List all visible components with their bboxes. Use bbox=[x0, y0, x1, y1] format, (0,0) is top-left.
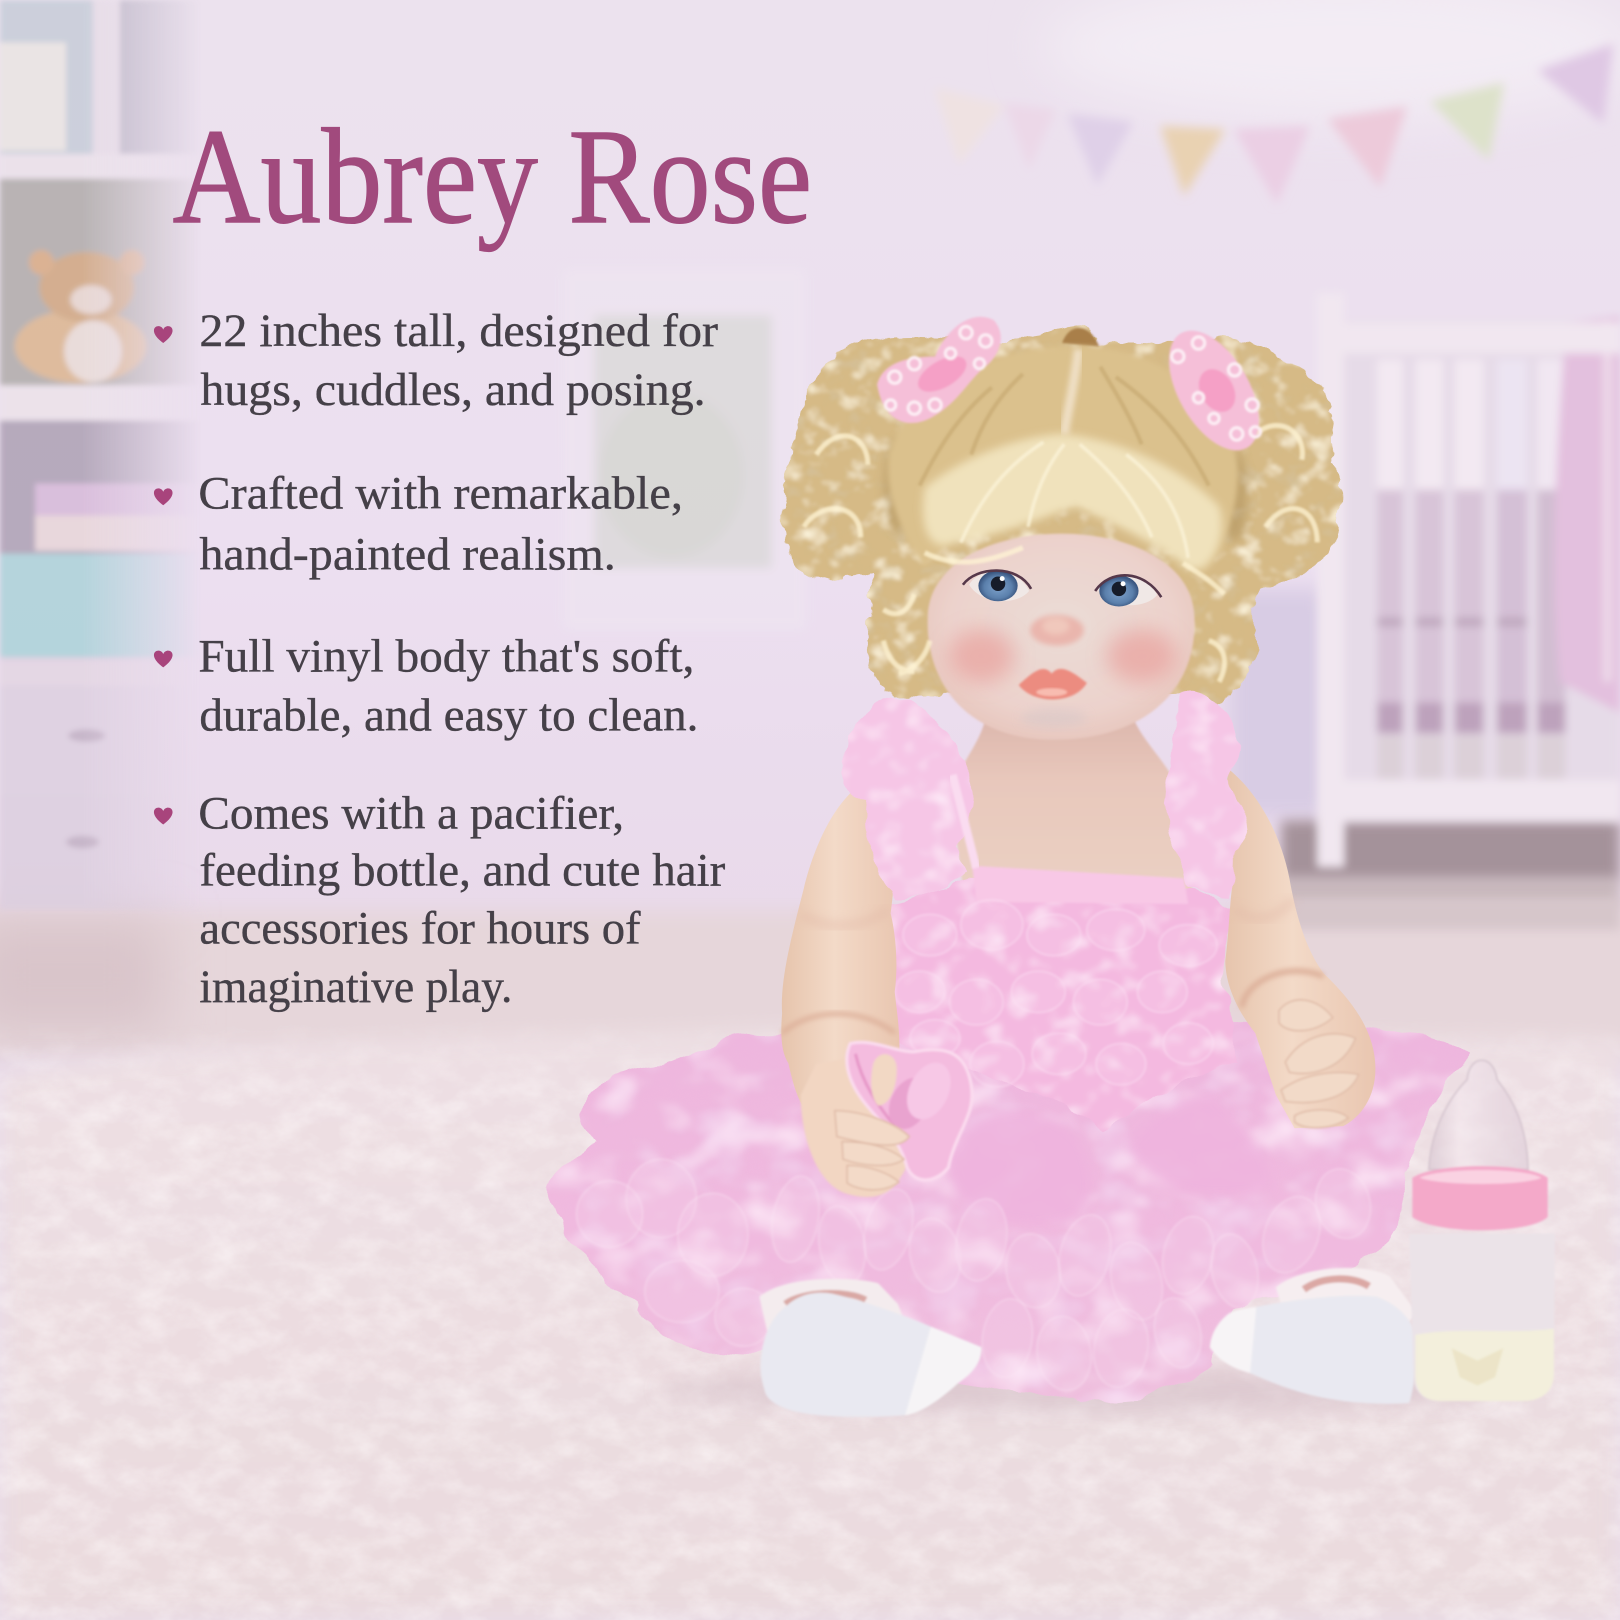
cheek blush bbox=[948, 629, 1177, 683]
background: shelves and toys bbox=[0, 0, 186, 901]
under-chin shadow bbox=[1021, 709, 1087, 727]
bullet: accessories: Comes with a pacifier, bbox=[198, 789, 624, 840]
left shoe bbox=[759, 1279, 982, 1417]
bullet: accessories: imaginative play. bbox=[199, 962, 512, 1013]
doll ruffled bodice bbox=[888, 866, 1238, 1130]
doll left arm bbox=[781, 780, 899, 1167]
doll left hand fingers bbox=[835, 1111, 909, 1190]
bullet: hand-painted bbox=[154, 468, 683, 580]
bullet: vinyl body bbox=[154, 632, 698, 741]
background: bunting flags bbox=[935, 43, 1614, 205]
doll left hand bbox=[801, 1049, 911, 1197]
background: nursery wall bbox=[0, 0, 1620, 1043]
hair tuft at crown bbox=[1062, 328, 1099, 347]
doll shadow bbox=[661, 1367, 1488, 1412]
doll right ruffled strap bbox=[1164, 691, 1250, 897]
bullet: 22 inches: 22 inches tall, designed for bbox=[199, 306, 719, 357]
feature list bbox=[154, 306, 726, 1013]
feeding bottle bbox=[1409, 1060, 1555, 1401]
smocked band bbox=[972, 866, 1188, 904]
doll left ruffled strap bbox=[843, 696, 976, 897]
doll skirt bbox=[546, 1023, 1468, 1398]
background: crib bbox=[1281, 293, 1620, 909]
right hand fingers bbox=[1279, 1000, 1359, 1128]
doll face bbox=[928, 534, 1195, 740]
lips bbox=[1019, 669, 1087, 699]
tulle panel highlights bbox=[945, 1094, 1271, 1224]
pacifier bbox=[847, 1042, 972, 1180]
doll hair front and bangs bbox=[804, 346, 1317, 682]
doll right arm bbox=[1224, 770, 1375, 1128]
right shoe bbox=[1210, 1268, 1418, 1404]
bullet: accessories: feeding bottle, and cute hair bbox=[199, 845, 726, 896]
thumb bbox=[871, 1054, 897, 1105]
bullet: hand-painted: Crafted with remarkable, bbox=[198, 468, 683, 519]
background: blurred window bbox=[563, 269, 806, 630]
bullet: hand-painted: hand-painted realism. bbox=[199, 529, 616, 580]
bullet: 22 inches bbox=[154, 306, 719, 416]
doll hair back bbox=[782, 326, 1343, 703]
bullet: vinyl body: durable, and easy to clean. bbox=[199, 690, 698, 741]
background: floor bbox=[0, 899, 1620, 1056]
bullet: vinyl body: Full vinyl body that's soft, bbox=[198, 632, 694, 683]
bullet: accessories bbox=[154, 789, 726, 1013]
background: fluffy rug bbox=[0, 992, 1620, 1620]
bullet: 22 inches: hugs, cuddles, and posing. bbox=[200, 365, 706, 416]
doll chest and neck bbox=[951, 713, 1193, 909]
doll left hair bow bbox=[877, 317, 1001, 423]
title: Aubrey Rose bbox=[173, 101, 812, 252]
nose bbox=[1030, 615, 1084, 646]
eyes bbox=[963, 570, 1161, 606]
doll bbox=[546, 316, 1555, 1417]
doll right hair bow bbox=[1150, 316, 1277, 465]
bullet: accessories: accessories for hours of bbox=[199, 903, 641, 954]
